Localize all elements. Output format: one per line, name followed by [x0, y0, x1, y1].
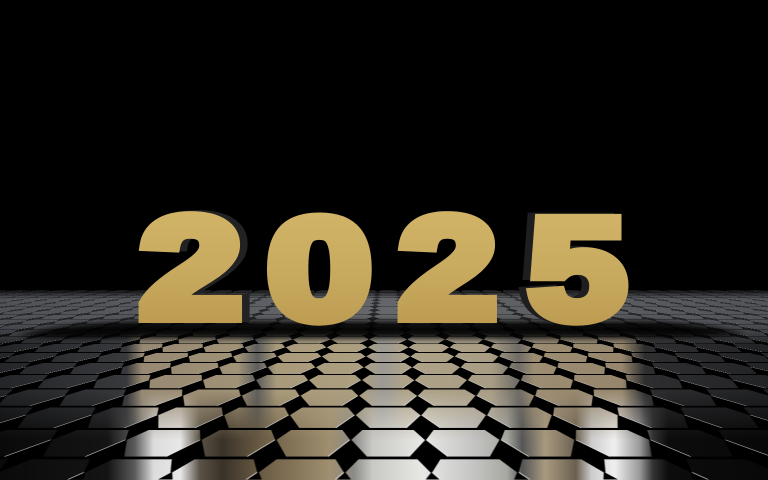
scene: black studio backdrop: [0, 210, 768, 480]
floor light bands and gold reflections: [0, 290, 768, 480]
floor: reflective hexagon tiles: [0, 290, 768, 480]
first digit 2: 2: [140, 187, 242, 347]
digit 5: 5: [529, 189, 626, 349]
digit 5: dark extruded side: 5: [522, 188, 619, 347]
first 2: dark extruded side: 2: [148, 186, 249, 346]
digit 0: 0: [267, 190, 372, 349]
second digit 2: 2: [399, 188, 497, 347]
hexagon tile grid in perspective: [0, 290, 768, 480]
